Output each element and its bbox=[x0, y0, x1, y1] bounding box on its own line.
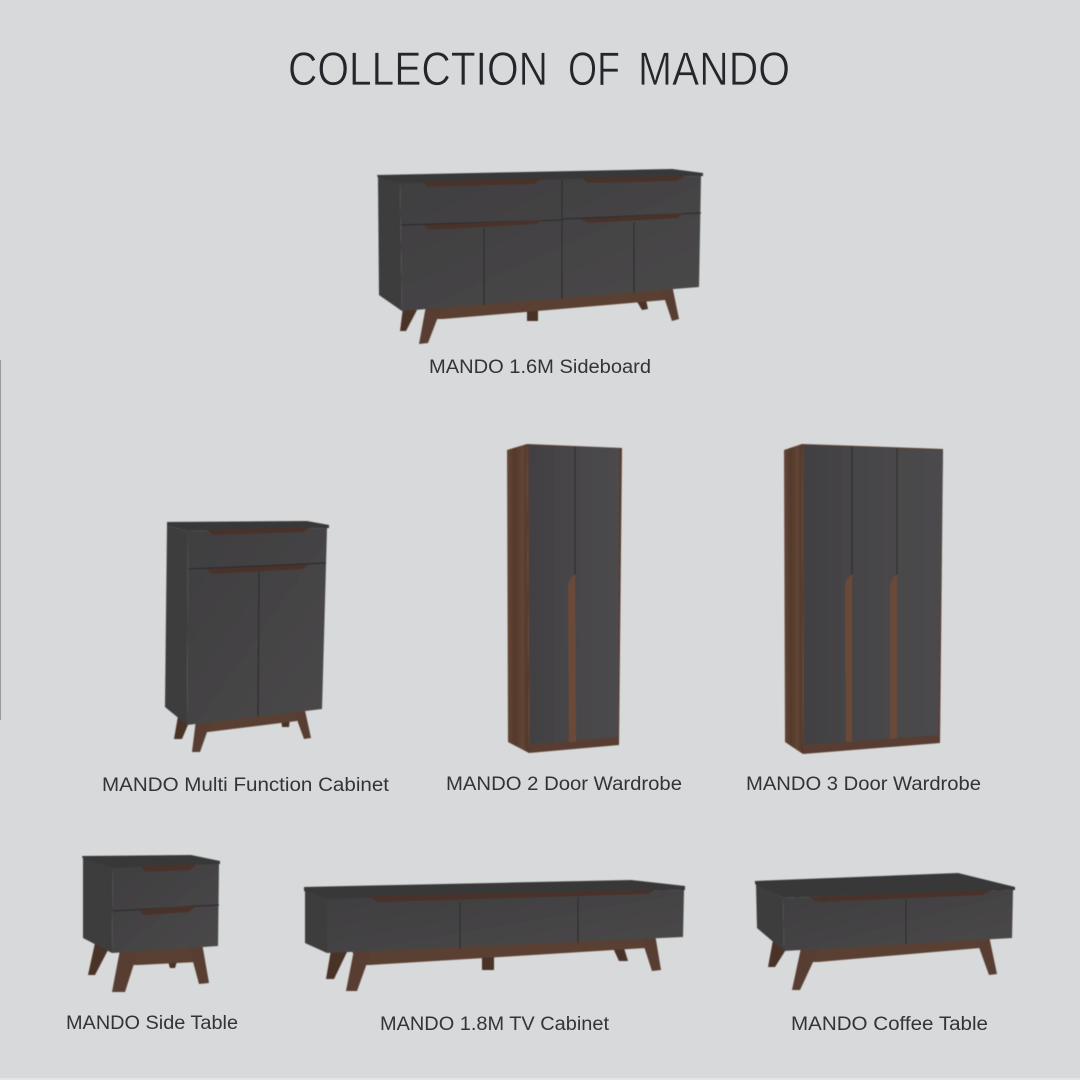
title: MANDO bbox=[638, 42, 790, 95]
label: cabinet: MANDO Multi Function Cabinet bbox=[102, 775, 390, 796]
panel: 2 door wardrobe bbox=[446, 444, 682, 795]
label: TV cabinet: MANDO 1.8M TV Cabinet bbox=[380, 1014, 610, 1035]
panel: 1.6M sideboard bbox=[377, 169, 703, 378]
furniture: cabinet bbox=[165, 521, 329, 752]
furniture: TV cabinet bbox=[304, 880, 685, 991]
label: sideboard: MANDO 1.6M Sideboard bbox=[429, 357, 651, 378]
furniture: side table bbox=[82, 855, 220, 992]
furniture: 3 door wardrobe bbox=[784, 444, 943, 754]
label: side table: MANDO Side Table bbox=[66, 1013, 238, 1034]
furniture: coffee table bbox=[755, 873, 1015, 990]
panel: coffee table bbox=[755, 873, 1015, 1035]
panel: 3 door wardrobe bbox=[746, 444, 981, 795]
title: OF bbox=[568, 42, 620, 95]
panel: side table bbox=[66, 855, 238, 1034]
furniture: 2 door wardrobe bbox=[507, 444, 622, 753]
furniture: sideboard bbox=[377, 169, 703, 344]
label: 3 door wardrobe: MANDO 3 Door Wardrobe bbox=[746, 774, 981, 795]
label: 2 door wardrobe: MANDO 2 Door Wardrobe bbox=[446, 774, 682, 795]
panel: 1.8M TV cabinet bbox=[304, 880, 685, 1035]
panel: multi function cabinet bbox=[102, 521, 390, 796]
title bbox=[288, 42, 790, 95]
label: coffee table: MANDO Coffee Table bbox=[791, 1014, 988, 1035]
title: COLLECTION bbox=[288, 42, 548, 95]
